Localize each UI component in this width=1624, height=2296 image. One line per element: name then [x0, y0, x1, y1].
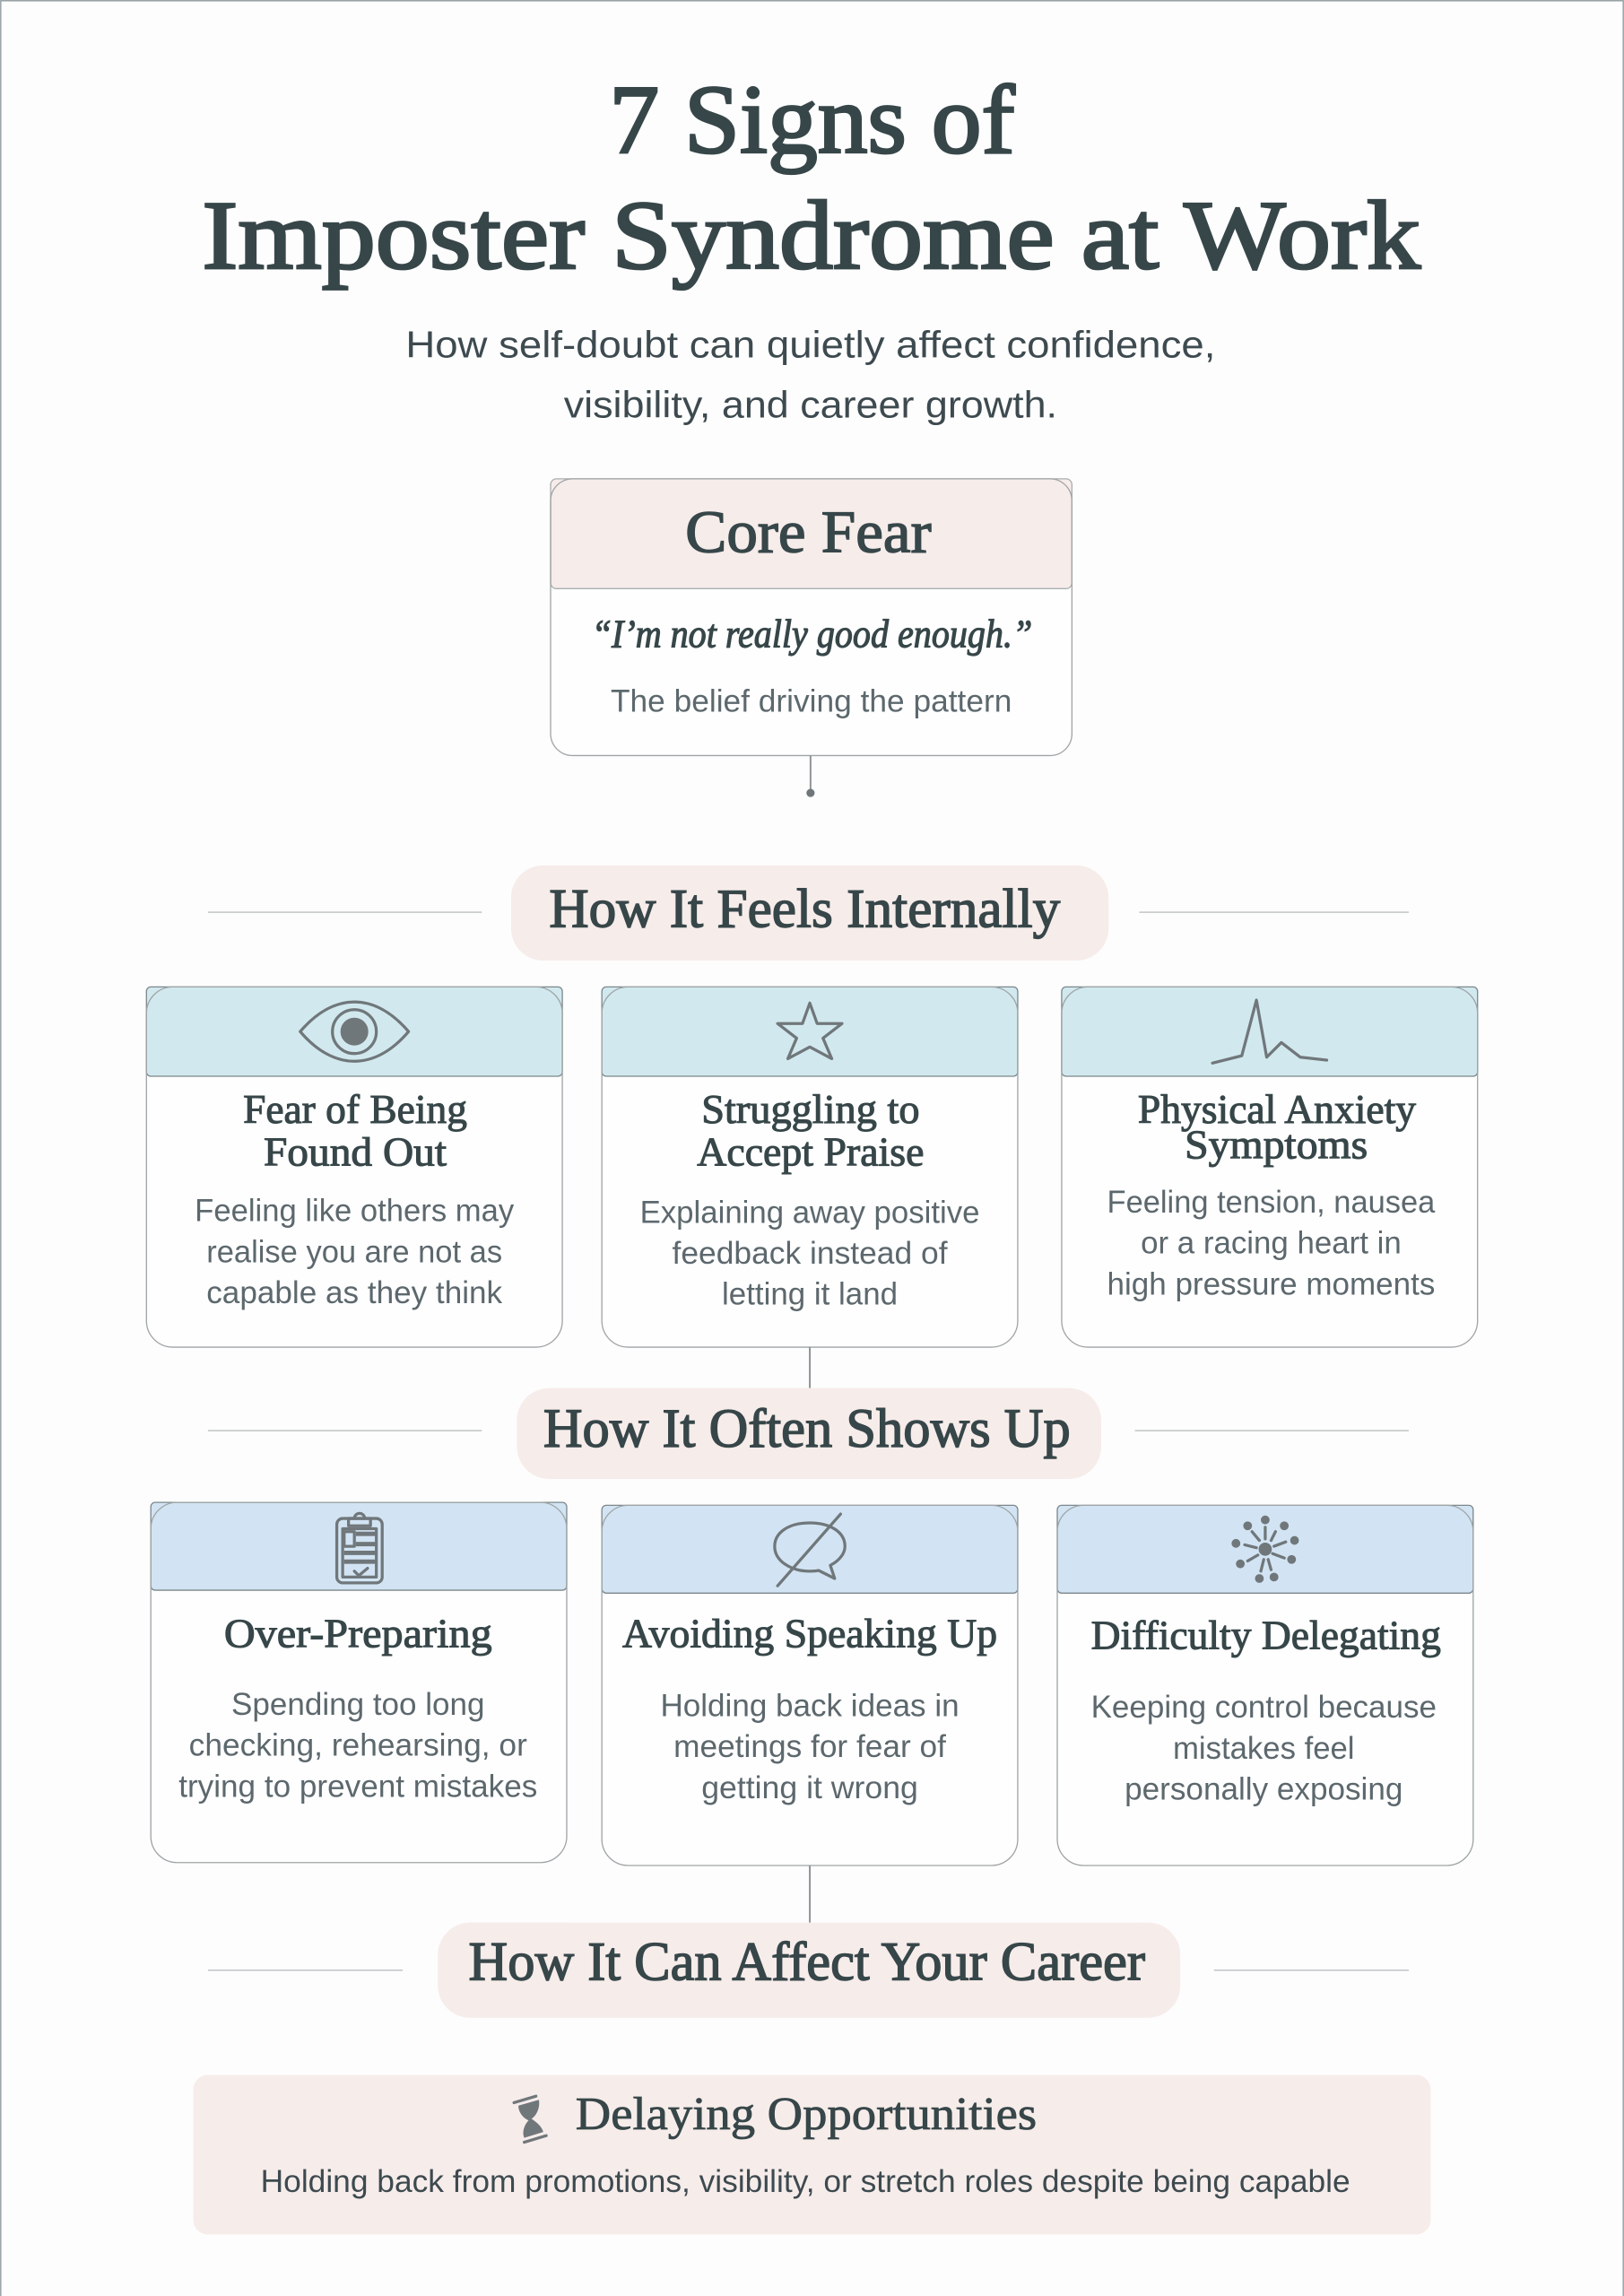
panel: difficulty delegating: mistakes feel	[1173, 1731, 1355, 1766]
icon: hourglass	[514, 2096, 546, 2143]
panel: over-preparing: Spending too long	[231, 1687, 485, 1722]
icon: pulse	[1212, 1000, 1327, 1063]
panel: fear of being found out	[146, 987, 562, 1347]
panel: physical anxiety symptoms: Physical Anxiety	[1138, 1086, 1416, 1132]
section heading: how it often shows up: How It Often Shows Up	[543, 1398, 1071, 1459]
panel: physical anxiety symptoms: Feeling tension, nausea	[1107, 1185, 1436, 1220]
panel: delaying opportunities: Holding back from promotions, visibility, or stretch roles despite being capable	[261, 2164, 1350, 2199]
panel: over-preparing: checking, rehearsing, or	[189, 1728, 527, 1763]
title: Imposter Syndrome at Work	[202, 181, 1420, 290]
panel: struggling to accept praise: Explaining away positive	[640, 1195, 979, 1230]
panel: physical anxiety symptoms: Symptoms	[1185, 1121, 1368, 1167]
panel: core fear	[551, 479, 1072, 755]
section heading: how it can affect your career	[208, 1923, 1409, 2018]
core fear heading: Core Fear	[685, 500, 932, 566]
panel: avoiding speaking up: Avoiding Speaking Up	[622, 1611, 997, 1657]
icon: star	[777, 1003, 842, 1058]
subtitle: visibility, and career growth.	[564, 383, 1057, 425]
panel: physical anxiety symptoms: or a racing heart in	[1141, 1226, 1402, 1261]
panel: delaying opportunities	[194, 2074, 1430, 2234]
icon: delegation hub	[1231, 1516, 1298, 1583]
panel: delaying opportunities: Delaying Opportunities	[576, 2088, 1037, 2140]
arrow: connector from core fear	[806, 755, 814, 797]
subtitle: How self-doubt can quietly affect confidence,	[405, 323, 1215, 365]
section heading: how it often shows up	[208, 1388, 1409, 1479]
panel: physical anxiety symptoms: high pressure moments	[1107, 1266, 1435, 1301]
panel: difficulty delegating: personally exposing	[1125, 1772, 1403, 1807]
panel: fear of being found out: capable as they think	[206, 1275, 503, 1310]
core fear caption: The belief driving the pattern	[611, 683, 1012, 718]
icon: eye	[300, 1002, 409, 1061]
icon: clipboard	[337, 1513, 382, 1583]
panel: fear of being found out: Fear of Being	[243, 1086, 467, 1132]
section heading: how it feels internally	[208, 865, 1409, 961]
panel: struggling to accept praise: Accept Praise	[697, 1129, 924, 1175]
panel: struggling to accept praise: Struggling to	[701, 1086, 920, 1132]
panel: avoiding speaking up: Holding back ideas in	[660, 1688, 960, 1723]
core fear quote: “I’m not really good enough.”	[592, 613, 1032, 657]
panel: difficulty delegating: Difficulty Delegating	[1091, 1612, 1441, 1657]
panel: difficulty delegating	[1057, 1505, 1473, 1866]
panel: avoiding speaking up: meetings for fear of	[673, 1729, 946, 1764]
panel: avoiding speaking up: getting it wrong	[701, 1770, 918, 1805]
panel: over-preparing	[151, 1502, 567, 1863]
panel: over-preparing: Over-Preparing	[224, 1611, 492, 1657]
title: 7 Signs of	[609, 65, 1015, 174]
panel: fear of being found out: realise you are not as	[206, 1234, 502, 1269]
panel: struggling to accept praise: letting it land	[722, 1277, 898, 1312]
icon: muted speech bubble	[775, 1514, 845, 1586]
arrow: connector to shows up	[809, 1347, 811, 1388]
title	[202, 65, 1420, 290]
panel: fear of being found out: Feeling like others may	[195, 1194, 515, 1229]
panel: avoiding speaking up	[602, 1505, 1018, 1866]
panel: fear of being found out: Found Out	[264, 1129, 447, 1175]
subtitle	[405, 323, 1215, 425]
section heading: how it can affect your career: How It Can Affect Your Career	[469, 1931, 1145, 1992]
arrow: connector to career	[809, 1866, 811, 1923]
panel: physical anxiety symptoms	[1062, 987, 1478, 1347]
panel: difficulty delegating: Keeping control because	[1091, 1690, 1437, 1725]
panel: over-preparing: trying to prevent mistakes	[178, 1769, 537, 1804]
panel: struggling to accept praise	[602, 987, 1018, 1347]
panel: struggling to accept praise: feedback instead of	[673, 1236, 948, 1271]
section heading: how it feels internally: How It Feels Internally	[549, 878, 1061, 939]
